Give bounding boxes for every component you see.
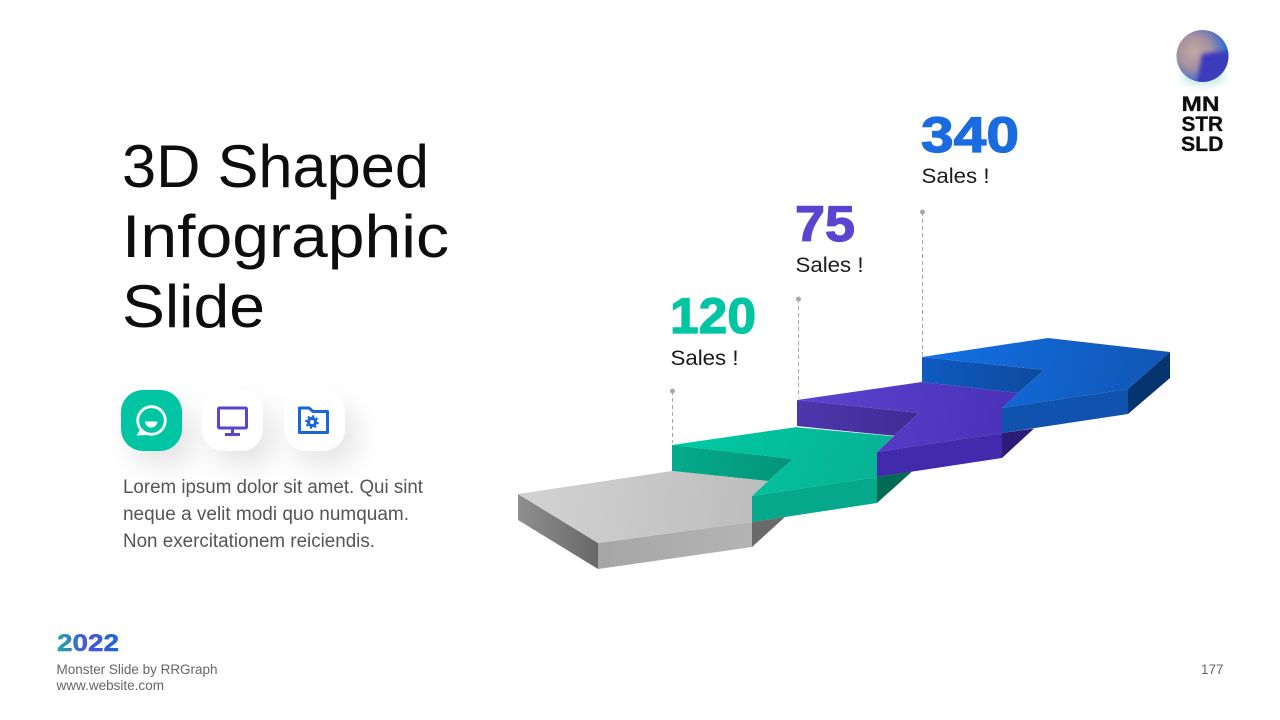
body text: Non exercitationem reiciendis. [123,531,375,552]
callout: 120 sales: 120 [670,288,756,344]
title: Slide [122,273,265,340]
body text: Lorem ipsum dolor sit amet. Qui sint [123,477,424,498]
callout: 75 sales: Sales ! [796,254,864,277]
icon: chat [121,390,182,451]
callout: 75 sales [795,196,864,277]
callout: 340 sales: Sales ! [922,165,990,188]
title: 3D Shaped [122,133,429,200]
callout: 120 sales [670,288,756,370]
credit: www.website.com [55,678,164,693]
credit: Monster Slide by RRGraph [56,662,218,677]
step: purple [797,382,1034,477]
logo text: STR [1182,113,1223,136]
body text [123,477,424,552]
page number: 177 [1201,661,1224,677]
title [122,133,449,340]
callout: 75 sales: 75 [795,196,855,252]
icon row [121,390,345,451]
year: 2022 [57,630,119,657]
step: blue [922,338,1170,433]
callout: 120 sales: Sales ! [670,347,738,370]
logo [1176,30,1228,152]
logo text [1181,93,1224,156]
logo text: SLD [1181,133,1224,156]
callout: 340 sales: 340 [921,107,1019,163]
logo text: MN [1182,93,1220,116]
title: Infographic [122,203,449,270]
callout: 340 sales [921,107,1019,188]
icon: folder settings [284,390,345,451]
body text: neque a velit modi quo numquam. [123,504,409,525]
credit [55,662,218,693]
leader lines [670,210,925,443]
3D stepped arrow chart [518,338,1170,569]
logo orb [1176,30,1236,88]
step: green [672,427,912,522]
footer [55,630,218,693]
step: gray [518,471,785,569]
icon: monitor [202,390,263,451]
